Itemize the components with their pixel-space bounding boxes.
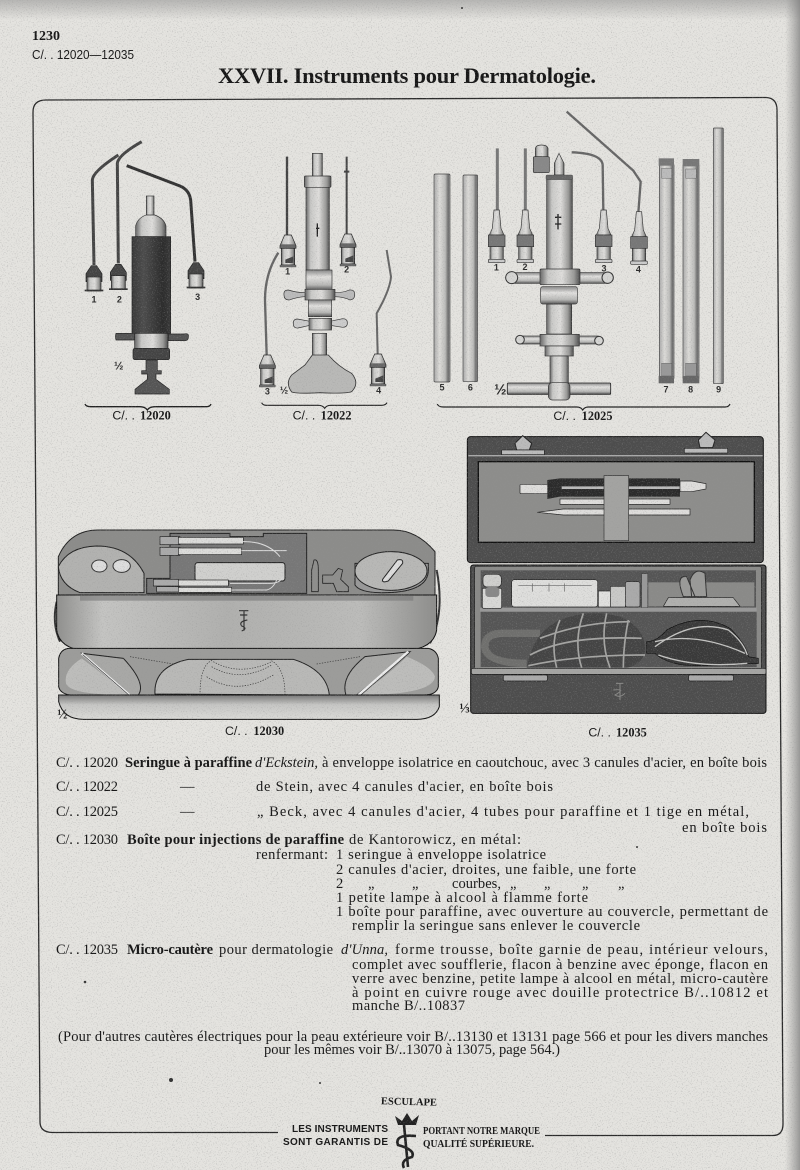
numbers: 3 — [265, 386, 270, 396]
needle 2 — [340, 157, 356, 266]
bracket — [437, 404, 730, 410]
entry 12035: Micro-cautère — [127, 942, 214, 958]
entry 12020: Seringue à paraffine — [125, 755, 253, 771]
scan specks — [84, 7, 638, 1084]
spirit lamp — [312, 560, 348, 592]
needle 4 — [370, 250, 391, 386]
needle 3 — [259, 253, 278, 387]
serpent mark — [316, 223, 319, 237]
entry 12020: à enveloppe isolatrice en caoutchouc, avec 3 canules d'acier, en boîte bois — [322, 755, 767, 771]
illustration: micro-cautery case 12035 — [459, 432, 766, 740]
handles — [115, 333, 188, 341]
numbers: 9 — [716, 384, 721, 394]
title: XXVII. Instruments pour Dermatologie. — [218, 63, 596, 88]
caption: 12030 — [253, 724, 284, 738]
entry 12035: pour dermatologie — [219, 942, 333, 958]
left oval lid — [58, 546, 144, 593]
illustration: instrument box 12030 — [55, 530, 440, 738]
entry 12035: C/. . 12035 — [56, 942, 118, 958]
numbers: 1 — [494, 263, 499, 273]
syringe 12022 — [259, 153, 391, 422]
shelf — [480, 608, 757, 612]
tray inserts — [66, 652, 435, 696]
fabric strap — [604, 476, 629, 541]
page number: 1230 — [32, 28, 60, 43]
embossed mark — [613, 683, 625, 700]
barrel tip — [146, 196, 154, 215]
barrel — [306, 185, 329, 270]
entry 12022 — [56, 779, 553, 795]
entry 12025: „ Beck, avec 4 canules d'acier, 4 tubes pour paraffine et 1 tige en métal, — [257, 804, 749, 820]
entry 12030: 1 seringue à enveloppe isolatrice — [336, 847, 546, 863]
serpent and staff — [397, 1125, 416, 1168]
cross-reference note: (Pour d'autres cautères électriques pour la peau extérieure voir B/..13130 et 13131 page 566 et pour les divers manches — [58, 1029, 768, 1045]
left guarantee text: SONT GARANTIS DE — [283, 1137, 388, 1148]
lower compartment — [481, 612, 757, 667]
entry 12035: manche B/..10837 — [352, 998, 465, 1014]
needle 1 — [280, 157, 296, 267]
side handles — [55, 570, 440, 643]
lower collar — [309, 318, 332, 330]
small jar — [482, 574, 502, 608]
entry 12030: de Kantorowicz, en métal: — [349, 832, 521, 848]
milled ring — [133, 348, 170, 360]
left guarantee text: LES INSTRUMENTS — [292, 1124, 388, 1135]
cross-reference note — [58, 1029, 768, 1058]
entry 12030: „ — [412, 876, 418, 892]
entry 12035: d'Unna, — [341, 942, 388, 958]
piston foot — [135, 360, 169, 394]
stem — [312, 333, 327, 357]
numbers: 3 — [601, 263, 606, 273]
base lip — [471, 668, 766, 674]
entry 12020: C/. . 12020 — [56, 755, 118, 771]
numbers: 2 — [344, 265, 349, 275]
numbers: 4 — [636, 265, 641, 275]
numbers: ½ — [494, 383, 506, 399]
entry 12025 — [56, 804, 767, 836]
thumb paddle — [288, 355, 356, 393]
numbers: 7 — [663, 384, 668, 394]
cap — [304, 176, 331, 187]
illustration group: syringe set 12025 — [434, 112, 730, 423]
brand name: ESCULAPE — [381, 1096, 437, 1109]
tubing — [485, 633, 540, 663]
lower crossbar — [516, 334, 603, 356]
glass tube 8 — [683, 159, 699, 383]
separate cap — [533, 145, 549, 173]
lower tray interior — [59, 648, 438, 695]
needle 2 — [109, 142, 142, 290]
syringe body — [546, 153, 573, 334]
caption: 12025 — [582, 409, 612, 423]
entry 12025: C/. . 12025 — [56, 804, 118, 820]
entry 12020: d'Eckstein, — [255, 755, 318, 771]
dotted outline of hidden parts — [130, 657, 360, 695]
glass tube 7 — [659, 158, 674, 383]
entry 12035: à point en cuivre rouge avec douille protectrice B/..10812 et — [352, 985, 768, 1001]
entry 12020 — [56, 755, 767, 771]
syringes and needles — [153, 537, 287, 592]
caption: C/. . — [553, 409, 576, 423]
lid outer — [467, 437, 763, 563]
entry 12030: „ — [510, 876, 516, 892]
shoulder — [136, 215, 166, 237]
right guarantee text: PORTANT NOTRE MARQUE — [423, 1125, 540, 1137]
scale: ½ — [57, 706, 67, 721]
numbers — [91, 292, 200, 372]
bracket — [262, 403, 387, 408]
entry 12035 — [56, 942, 769, 1014]
illustration group: syringes 12020 and 12022 — [85, 142, 391, 422]
scale: ⅓ — [459, 701, 470, 716]
scan shading at the top edge — [0, 0, 800, 20]
needles 1-4 — [488, 112, 647, 264]
scan shading at the right edge — [785, 0, 800, 1170]
entry 12035: verre avec benzine, petite lampe à alcool en métal, micro-cautère — [352, 971, 768, 987]
entry 12030: „ — [582, 876, 588, 892]
collar — [135, 333, 168, 349]
numbers: 1 — [285, 266, 290, 276]
benzine flask — [512, 574, 648, 608]
lower handle — [293, 319, 347, 328]
lid rim — [468, 454, 763, 458]
lid velvet — [478, 462, 754, 542]
caption: 12035 — [616, 726, 647, 740]
numbers: ½ — [114, 360, 123, 372]
right tin with lid — [355, 552, 428, 593]
entry 12030: „ — [544, 876, 550, 892]
upper box interior — [58, 530, 435, 595]
entry 12030: „ — [368, 876, 374, 892]
paraffin tubes 5 and 6 — [434, 174, 478, 382]
right guarantee text: QUALITÉ SUPÉRIEURE. — [423, 1138, 534, 1150]
caption: C/. . — [112, 408, 135, 422]
tray shadow under rim — [80, 596, 413, 601]
entry 12030: renfermant: — [256, 847, 328, 863]
caption: 12022 — [321, 408, 351, 422]
upper crossbar — [506, 269, 613, 304]
entry 12030: C/. . 12030 — [56, 832, 118, 848]
entry 12030 — [56, 832, 768, 934]
entry 12030: Boîte pour injections de paraffine — [127, 832, 345, 848]
entry 12022: C/. . 12022 — [56, 779, 118, 795]
upper compartment — [481, 570, 756, 608]
cautery handle and tips — [520, 478, 706, 515]
metal rod 9 — [713, 128, 723, 384]
collars — [306, 270, 332, 290]
footer: Esculape trademark notice — [283, 1096, 540, 1168]
right guarantee text — [423, 1125, 540, 1150]
entry 12030: 2 canules d'acier, droites, une faible, une forte — [336, 862, 636, 878]
syringe 12020 — [85, 142, 211, 422]
entry 12030: courbes, — [452, 876, 501, 892]
numbers: 3 — [195, 292, 200, 302]
lid clasps — [502, 432, 728, 455]
entry 12035: forme trousse, boîte garnie de peau, intérieur velours, — [395, 942, 768, 958]
entry 12025: en boîte bois — [682, 820, 767, 836]
caption: C/. . — [293, 408, 315, 422]
upper handle — [284, 290, 355, 300]
caption: 12020 — [140, 408, 171, 422]
bellows bulb — [647, 620, 758, 666]
cross-reference note: pour les mêmes voir B/..13070 à 13075, page 564.) — [264, 1042, 560, 1058]
lamp compartment — [648, 571, 754, 606]
entry 12035: complet avec soufflerie, flacon à benzine avec éponge, flacon en — [352, 957, 769, 973]
numbers: 1 — [91, 294, 96, 304]
entry 12022: — — [179, 779, 195, 795]
entry 12022: de Stein, avec 4 canules d'acier, en boîte bois — [256, 779, 553, 795]
catalogue reference range: C/. . 12020—12035 — [32, 48, 134, 62]
lower tray front band — [59, 695, 439, 719]
entry 12030: 1 boîte pour paraffine, avec ouverture au couvercle, permettant de — [336, 904, 768, 920]
numbers: ½ — [280, 385, 288, 396]
numbers: 6 — [468, 383, 473, 393]
numbers — [265, 265, 381, 396]
base catches — [503, 675, 733, 681]
entry 12030: 1 petite lampe à alcool à flamme forte — [336, 890, 588, 906]
caption: C/. . — [588, 726, 611, 740]
numbers — [439, 262, 721, 399]
base rim — [475, 566, 761, 670]
rubber sleeve — [132, 237, 171, 333]
left guarantee text — [283, 1124, 388, 1148]
serpent mark — [239, 611, 248, 631]
needle 1 — [85, 155, 118, 291]
netted bulb — [527, 613, 645, 668]
entry 12030: „ — [618, 876, 624, 892]
entry 12030: 2 — [336, 876, 343, 892]
needle 3 — [127, 166, 205, 288]
inner compartment — [147, 533, 307, 593]
numbers: 4 — [376, 386, 381, 396]
entry 12030: remplir la seringue sans enlever le couvercle — [352, 918, 640, 934]
bracket — [85, 404, 211, 410]
tip — [312, 153, 322, 177]
upper box front face — [57, 595, 437, 651]
numbers: 8 — [688, 384, 693, 394]
numbers: 2 — [117, 294, 122, 304]
numbers: 5 — [439, 383, 444, 393]
crown — [395, 1113, 419, 1125]
caption: C/. . — [225, 724, 248, 738]
numbers: 2 — [522, 262, 527, 272]
case base outer — [471, 565, 766, 713]
entry 12025: — — [179, 804, 195, 820]
stem and T-handle — [507, 356, 611, 400]
